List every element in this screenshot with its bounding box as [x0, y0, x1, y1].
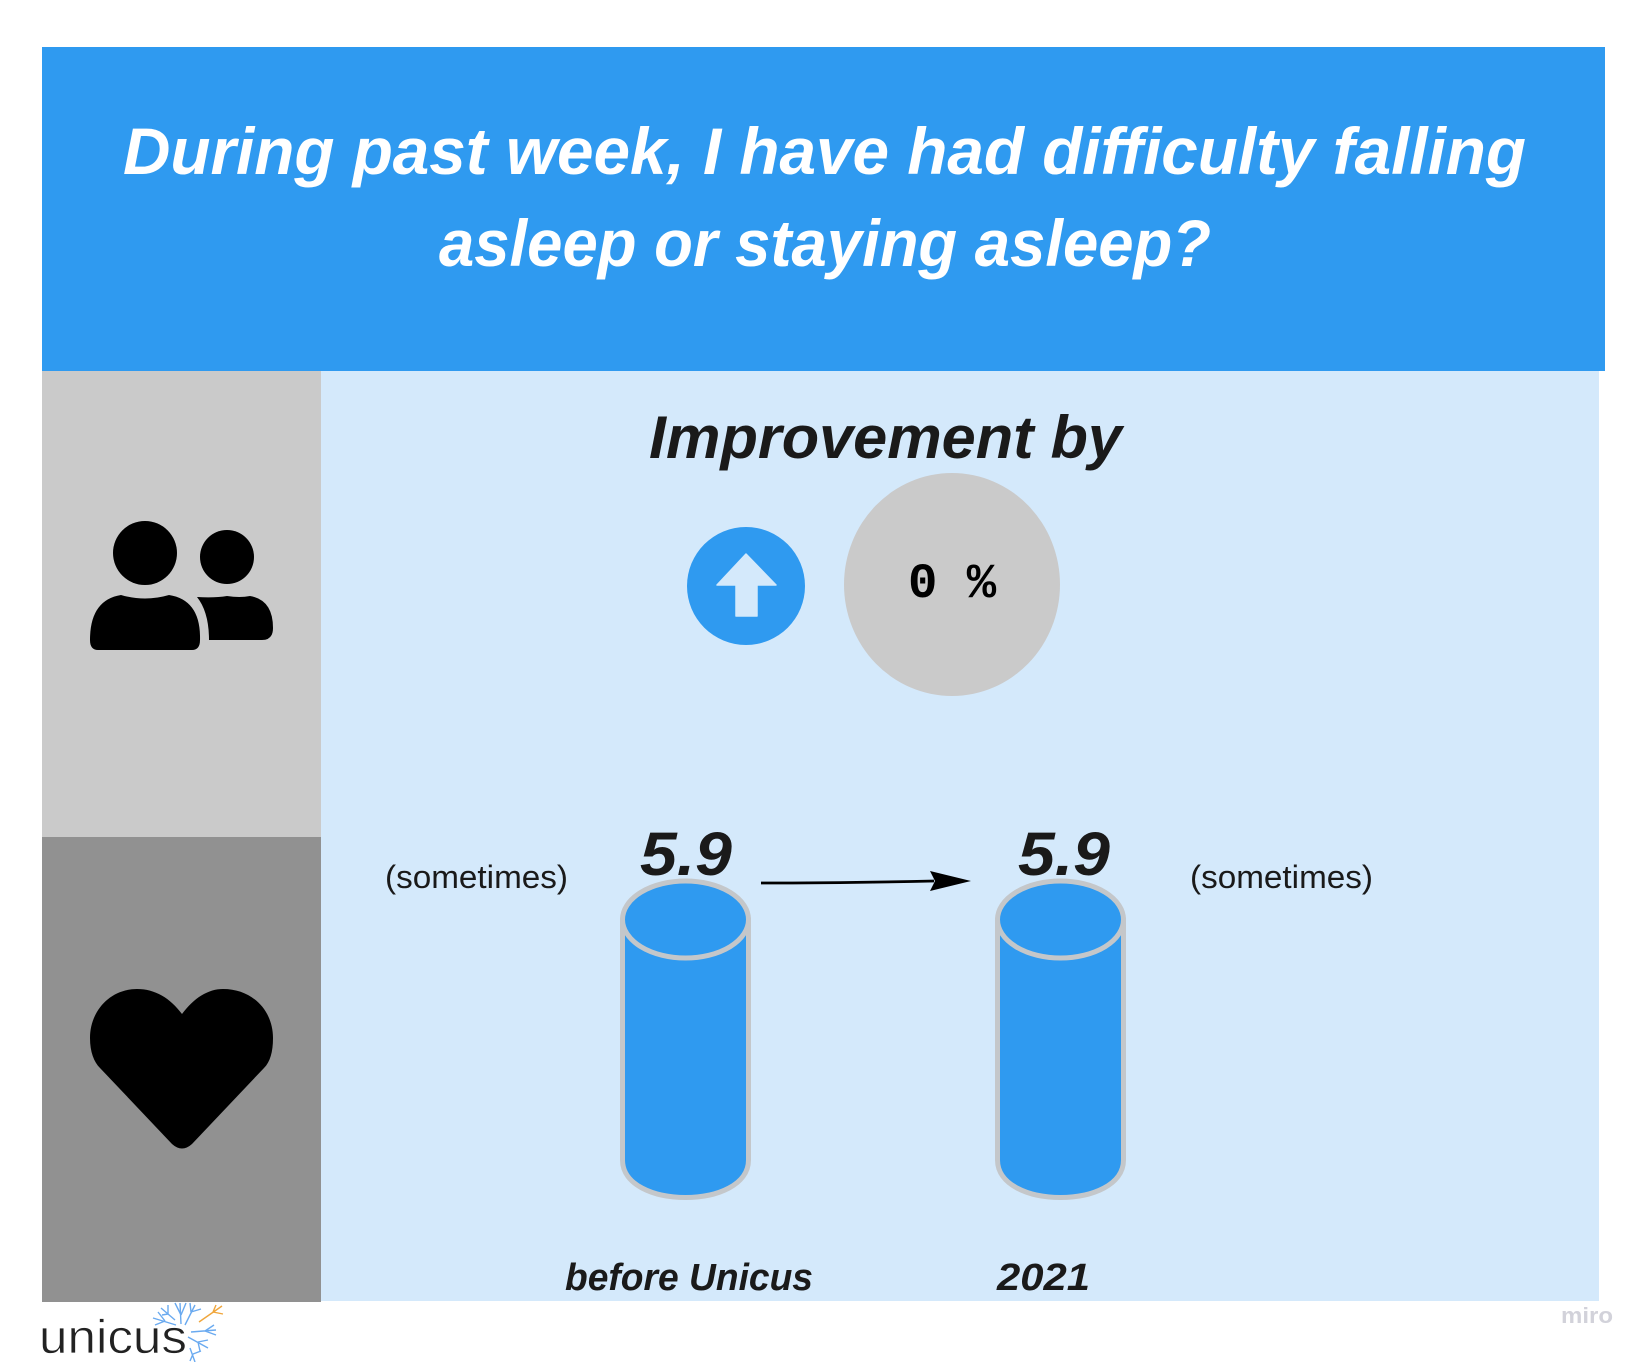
logo rays: [153, 1303, 216, 1362]
label: left sometimes: (sometimes): [385, 859, 568, 895]
logo wordmark: unicus: [39, 1310, 187, 1362]
header banner: [42, 47, 1605, 371]
label: before Unicus: before Unicus: [565, 1257, 813, 1299]
cylinder: 2021: [998, 881, 1124, 1198]
callout: percent circle: [844, 473, 1060, 696]
value: before: 5.9: [640, 820, 732, 888]
icon: people: [90, 521, 273, 650]
icon: up arrow: [687, 527, 805, 645]
logo orange ray: [199, 1305, 223, 1322]
label: right sometimes: (sometimes): [1190, 859, 1373, 895]
logo: unicus: [39, 1303, 223, 1362]
title: asleep or staying asleep?: [439, 206, 1211, 280]
panel: people sidebar: [42, 371, 321, 837]
arrow: before to 2021: [761, 871, 971, 891]
panel: main content background: [321, 371, 1599, 1301]
panel: heart sidebar: [42, 837, 321, 1302]
heading: improvement by: Improvement by: [649, 404, 1125, 471]
title: During past week, I have had difficulty falling: [123, 114, 1526, 188]
title: [123, 114, 1526, 280]
cylinder: before: [622, 881, 748, 1198]
label: 2021: 2021: [996, 1257, 1090, 1299]
percent value: 0 %: [908, 556, 997, 612]
icon: heart: [90, 989, 273, 1148]
value: 2021: 5.9: [1018, 820, 1110, 888]
watermark: miro: miro: [1561, 1303, 1613, 1328]
